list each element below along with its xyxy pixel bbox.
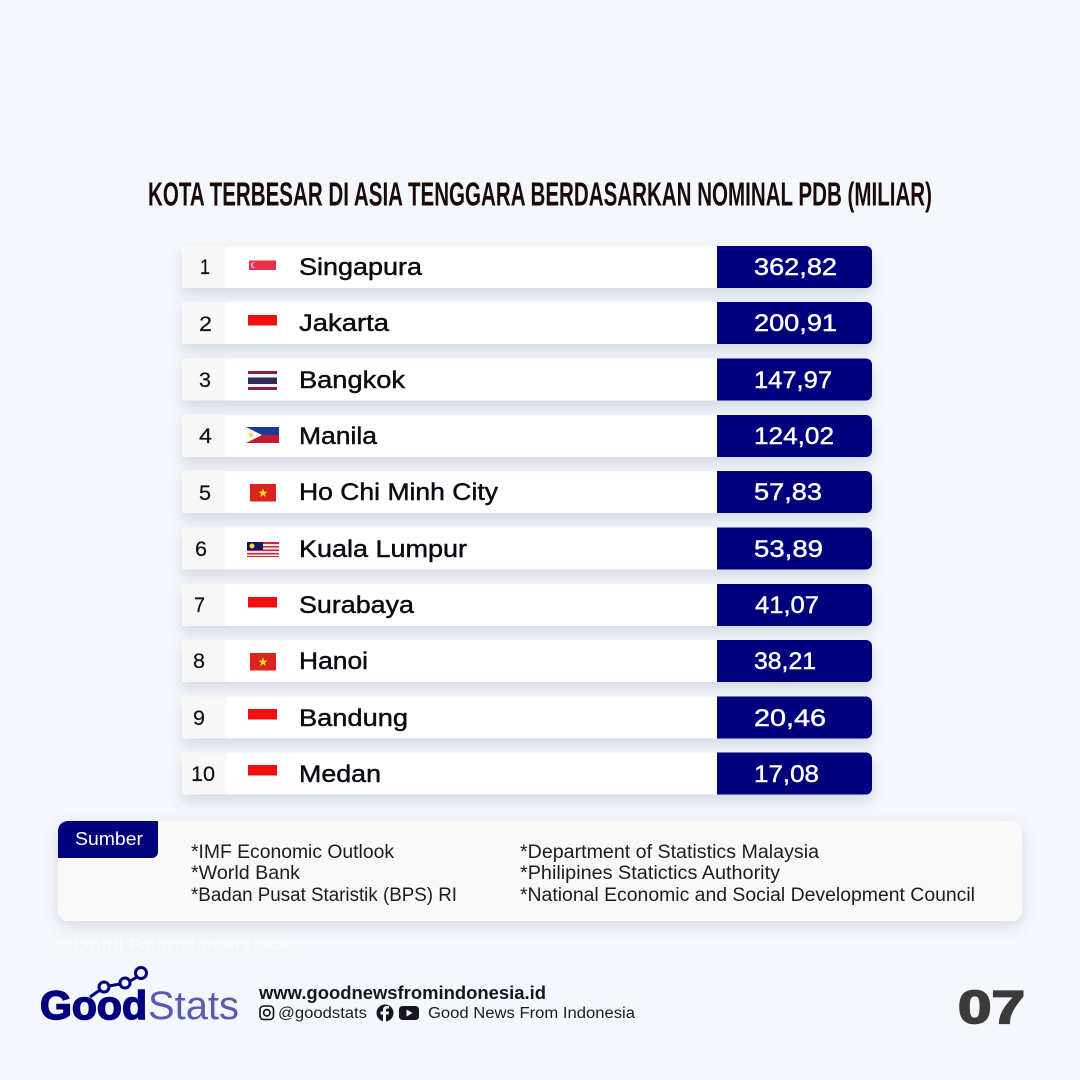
logo chart line: [90, 968, 146, 997]
row 7: Surabaya: [182, 584, 872, 626]
row 6: Kuala Lumpur: Kuala Lumpur: [299, 536, 467, 563]
row 6: Kuala Lumpur: [182, 528, 872, 570]
icon: youtube: [399, 1006, 419, 1020]
row 1: Singapura: [182, 246, 872, 288]
source tab: Sumber: [75, 829, 143, 849]
ranking table: [182, 246, 872, 794]
row 2: Jakarta: [182, 302, 872, 344]
sources left column: *World Bank: [191, 863, 301, 884]
flag: Thailand: [248, 371, 277, 390]
row 9: Bandung: Bandung: [299, 705, 408, 732]
row 6: Kuala Lumpur: 6: [195, 538, 207, 561]
instagram handle: @goodstats: [278, 1005, 367, 1022]
row 8: Hanoi: 8: [193, 650, 205, 673]
row 9: Bandung: 9: [193, 707, 205, 730]
row 7: Surabaya: 41,07: [755, 592, 819, 619]
sources right column: *Department of Statistics Malaysia: [520, 842, 819, 863]
row 10: Medan: 10: [191, 763, 215, 786]
row 4: Manila: 4: [199, 425, 212, 448]
logo: GoodStats: Stats: [148, 984, 239, 1028]
sources right column: *Philipines Statictics Authority: [520, 863, 781, 884]
flag: Indonesia: [248, 597, 277, 608]
logo: GoodStats: Good: [40, 984, 147, 1028]
row 5: Ho Chi Minh City: 5: [199, 482, 211, 505]
row 2: Jakarta: 200,91: [754, 310, 837, 337]
flag: Indonesia: [248, 709, 277, 720]
flag: Vietnam: [250, 653, 276, 670]
row 2: Jakarta: 2: [199, 313, 212, 336]
row 3: Bangkok: 147,97: [754, 367, 832, 394]
row 1: Singapura: Singapura: [299, 254, 422, 281]
row 5: Ho Chi Minh City: Ho Chi Minh City: [299, 479, 499, 506]
row 7: Surabaya: Surabaya: [299, 592, 414, 619]
sources left column: *IMF Economic Outlook: [191, 842, 394, 863]
row 3: Bangkok: Bangkok: [299, 367, 406, 394]
row 9: Bandung: [182, 696, 872, 738]
row 5: Ho Chi Minh City: 57,83: [754, 479, 822, 506]
website: www.goodnewsfromindonesia.id: [258, 983, 546, 1003]
flag: Philippines: [246, 427, 279, 443]
row 4: Manila: 124,02: [754, 423, 834, 450]
flag: Indonesia: [248, 315, 277, 326]
page number: 07: [958, 981, 1025, 1033]
row 10: Medan: Medan: [299, 761, 381, 788]
row 8: Hanoi: 38,21: [754, 648, 816, 675]
photo credit: © Luthfi Fatur/shutterstock: [54, 935, 291, 954]
row 7: Surabaya: 7: [194, 594, 205, 617]
row 10: Medan: 17,08: [754, 761, 819, 788]
sources left column: [191, 842, 457, 906]
flag: Indonesia: [248, 765, 277, 776]
sources right column: [520, 842, 975, 906]
flag: Singapore: [249, 260, 276, 270]
panel: sources: [58, 821, 1022, 921]
row 1: Singapura: 1: [200, 256, 210, 279]
row 10: Medan: [182, 752, 872, 794]
icon: facebook: [376, 1004, 394, 1022]
row 8: Hanoi: Hanoi: [299, 648, 368, 675]
flag: Malaysia: [247, 542, 279, 557]
source tab: [58, 821, 158, 858]
row 2: Jakarta: Jakarta: [299, 310, 389, 337]
row 9: Bandung: 20,46: [754, 705, 826, 732]
logo: GoodStats: [40, 968, 239, 1028]
flag: Vietnam: [250, 484, 276, 502]
row 4: Manila: [182, 415, 872, 457]
row 1: Singapura: 362,82: [754, 254, 837, 281]
facebook youtube handle: Good News From Indonesia: [428, 1005, 635, 1022]
row 3: Bangkok: 3: [199, 369, 211, 392]
row 6: Kuala Lumpur: 53,89: [754, 536, 823, 563]
row 4: Manila: Manila: [299, 423, 377, 450]
sources right column: *National Economic and Social Development Council: [520, 885, 975, 906]
sources left column: *Badan Pusat Staristik (BPS) RI: [191, 885, 457, 906]
icon: instagram: [260, 1006, 274, 1020]
row 8: Hanoi: [182, 640, 872, 682]
row 5: Ho Chi Minh City: [182, 471, 872, 513]
row 3: Bangkok: [182, 358, 872, 400]
